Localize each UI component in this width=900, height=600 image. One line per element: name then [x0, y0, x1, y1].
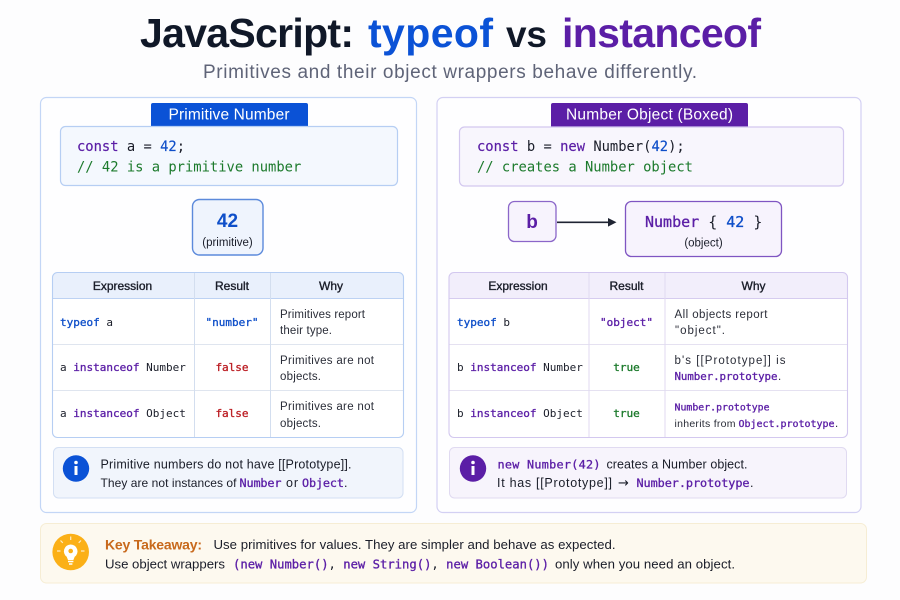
table: object expressions: "object". [675, 325, 725, 337]
table: object expressions: . [835, 418, 838, 430]
callout: object note [450, 448, 846, 498]
table: object expressions: true [613, 407, 640, 420]
callout: object note: new Number(42) [498, 458, 600, 472]
callout: object note: . [750, 476, 753, 490]
object box: Number 42 [626, 202, 782, 256]
table: object expressions: Object.prototype [738, 419, 834, 430]
code block: primitive: const a = 42; [77, 139, 185, 155]
callout: object note: Number.prototype [636, 476, 750, 490]
table: primitive expressions: Result [215, 279, 250, 293]
callout: key takeaway: Key Takeaway: [105, 536, 202, 552]
table: object expressions: Result [609, 279, 644, 293]
heading: number object [551, 103, 748, 127]
title: JavaScript: [140, 10, 354, 56]
table: primitive expressions: Why [319, 279, 343, 293]
callout: key takeaway: Use object wrappers [105, 556, 225, 572]
table: primitive expressions: Expression [93, 279, 152, 293]
value box: 42 primitive: (primitive) [202, 237, 253, 249]
subtitle: Primitives and their object wrappers behave differently. [203, 62, 697, 83]
title: vs [506, 14, 547, 55]
table: object expressions: inherits from [674, 418, 736, 430]
table: object expressions: b instanceof Object [457, 407, 583, 420]
table: primitive expressions: "number" [206, 316, 258, 329]
arrow: b to object [557, 218, 616, 227]
callout: primitive note: Primitive numbers do not have [[Prototype]]. [100, 458, 352, 472]
callout: primitive note [54, 448, 403, 498]
table: object expressions: b instanceof Number [457, 361, 583, 374]
panel: number object [437, 98, 861, 512]
callout: primitive note: or [286, 476, 298, 490]
table: primitive expressions: objects. [280, 418, 321, 430]
callout: key takeaway: (new Number(), new String(), new Boolean()) [233, 558, 549, 572]
code block: object: // creates a Number object [477, 160, 693, 176]
table: object expressions: "object" [600, 316, 653, 329]
code block: primitive [60, 126, 398, 186]
object box: Number 42: (object) [684, 238, 723, 250]
reference box: b [508, 202, 556, 242]
table: primitive expressions: typeof a [60, 316, 113, 329]
callout: primitive note: They are not instances of [100, 476, 237, 490]
table: object expressions [449, 272, 848, 438]
table: primitive expressions: Primitives report [280, 309, 366, 321]
table: primitive expressions: Primitives are not [280, 401, 375, 413]
code block: object: const b = new Number(42); [477, 139, 685, 155]
title [140, 10, 761, 56]
title: typeof [368, 10, 493, 56]
table: primitive expressions: objects. [280, 371, 321, 383]
heading: primitive number [151, 103, 308, 127]
value box: 42 primitive: 42 [217, 211, 238, 232]
callout: key takeaway: Use primitives for values. They are simpler and behave as expected. [214, 537, 616, 552]
callout: object note: creates a Number object. [606, 458, 748, 472]
callout: primitive note: Number [240, 476, 282, 490]
title: instanceof [562, 10, 761, 56]
table: object expressions: Number.prototype [674, 370, 778, 383]
heading: primitive number: Primitive Number [168, 106, 290, 124]
callout: object note: It has [[Prototype]] [497, 476, 612, 490]
table: object expressions: All objects report [674, 309, 768, 321]
table: object expressions: true [613, 361, 640, 374]
table: primitive expressions: their type. [280, 325, 332, 337]
callout: primitive note: Object [302, 476, 344, 490]
reference box: b: b [526, 212, 538, 233]
table: object expressions: Number.prototype [674, 402, 770, 414]
icon: info [63, 455, 89, 482]
object box: Number 42: Number { 42 } [645, 213, 762, 231]
table: primitive expressions [52, 272, 404, 438]
table: object expressions: . [778, 371, 781, 383]
icon: info [460, 455, 486, 482]
panel: primitive number [40, 98, 416, 512]
table: primitive expressions: false [215, 407, 249, 420]
icon: light bulb [52, 534, 89, 570]
table: primitive expressions: false [215, 361, 249, 374]
table: object expressions: typeof b [457, 316, 510, 329]
callout: primitive note: . [344, 476, 347, 490]
table: object expressions: Expression [488, 279, 548, 293]
table: primitive expressions: a instanceof Object [60, 407, 186, 420]
table: object expressions: b's [[Prototype]] is [674, 355, 786, 367]
callout: object note: → [618, 476, 629, 491]
heading: number object: Number Object (Boxed) [566, 106, 733, 124]
callout: key takeaway [40, 524, 866, 583]
table: object expressions: Why [742, 279, 766, 293]
callout: key takeaway: only when you need an object. [555, 556, 735, 572]
code block: object [460, 127, 844, 186]
table: primitive expressions: Primitives are not [280, 355, 375, 367]
code block: primitive: // 42 is a primitive number [77, 160, 301, 176]
table: primitive expressions: a instanceof Number [60, 361, 186, 374]
value box: 42 primitive [192, 200, 263, 255]
